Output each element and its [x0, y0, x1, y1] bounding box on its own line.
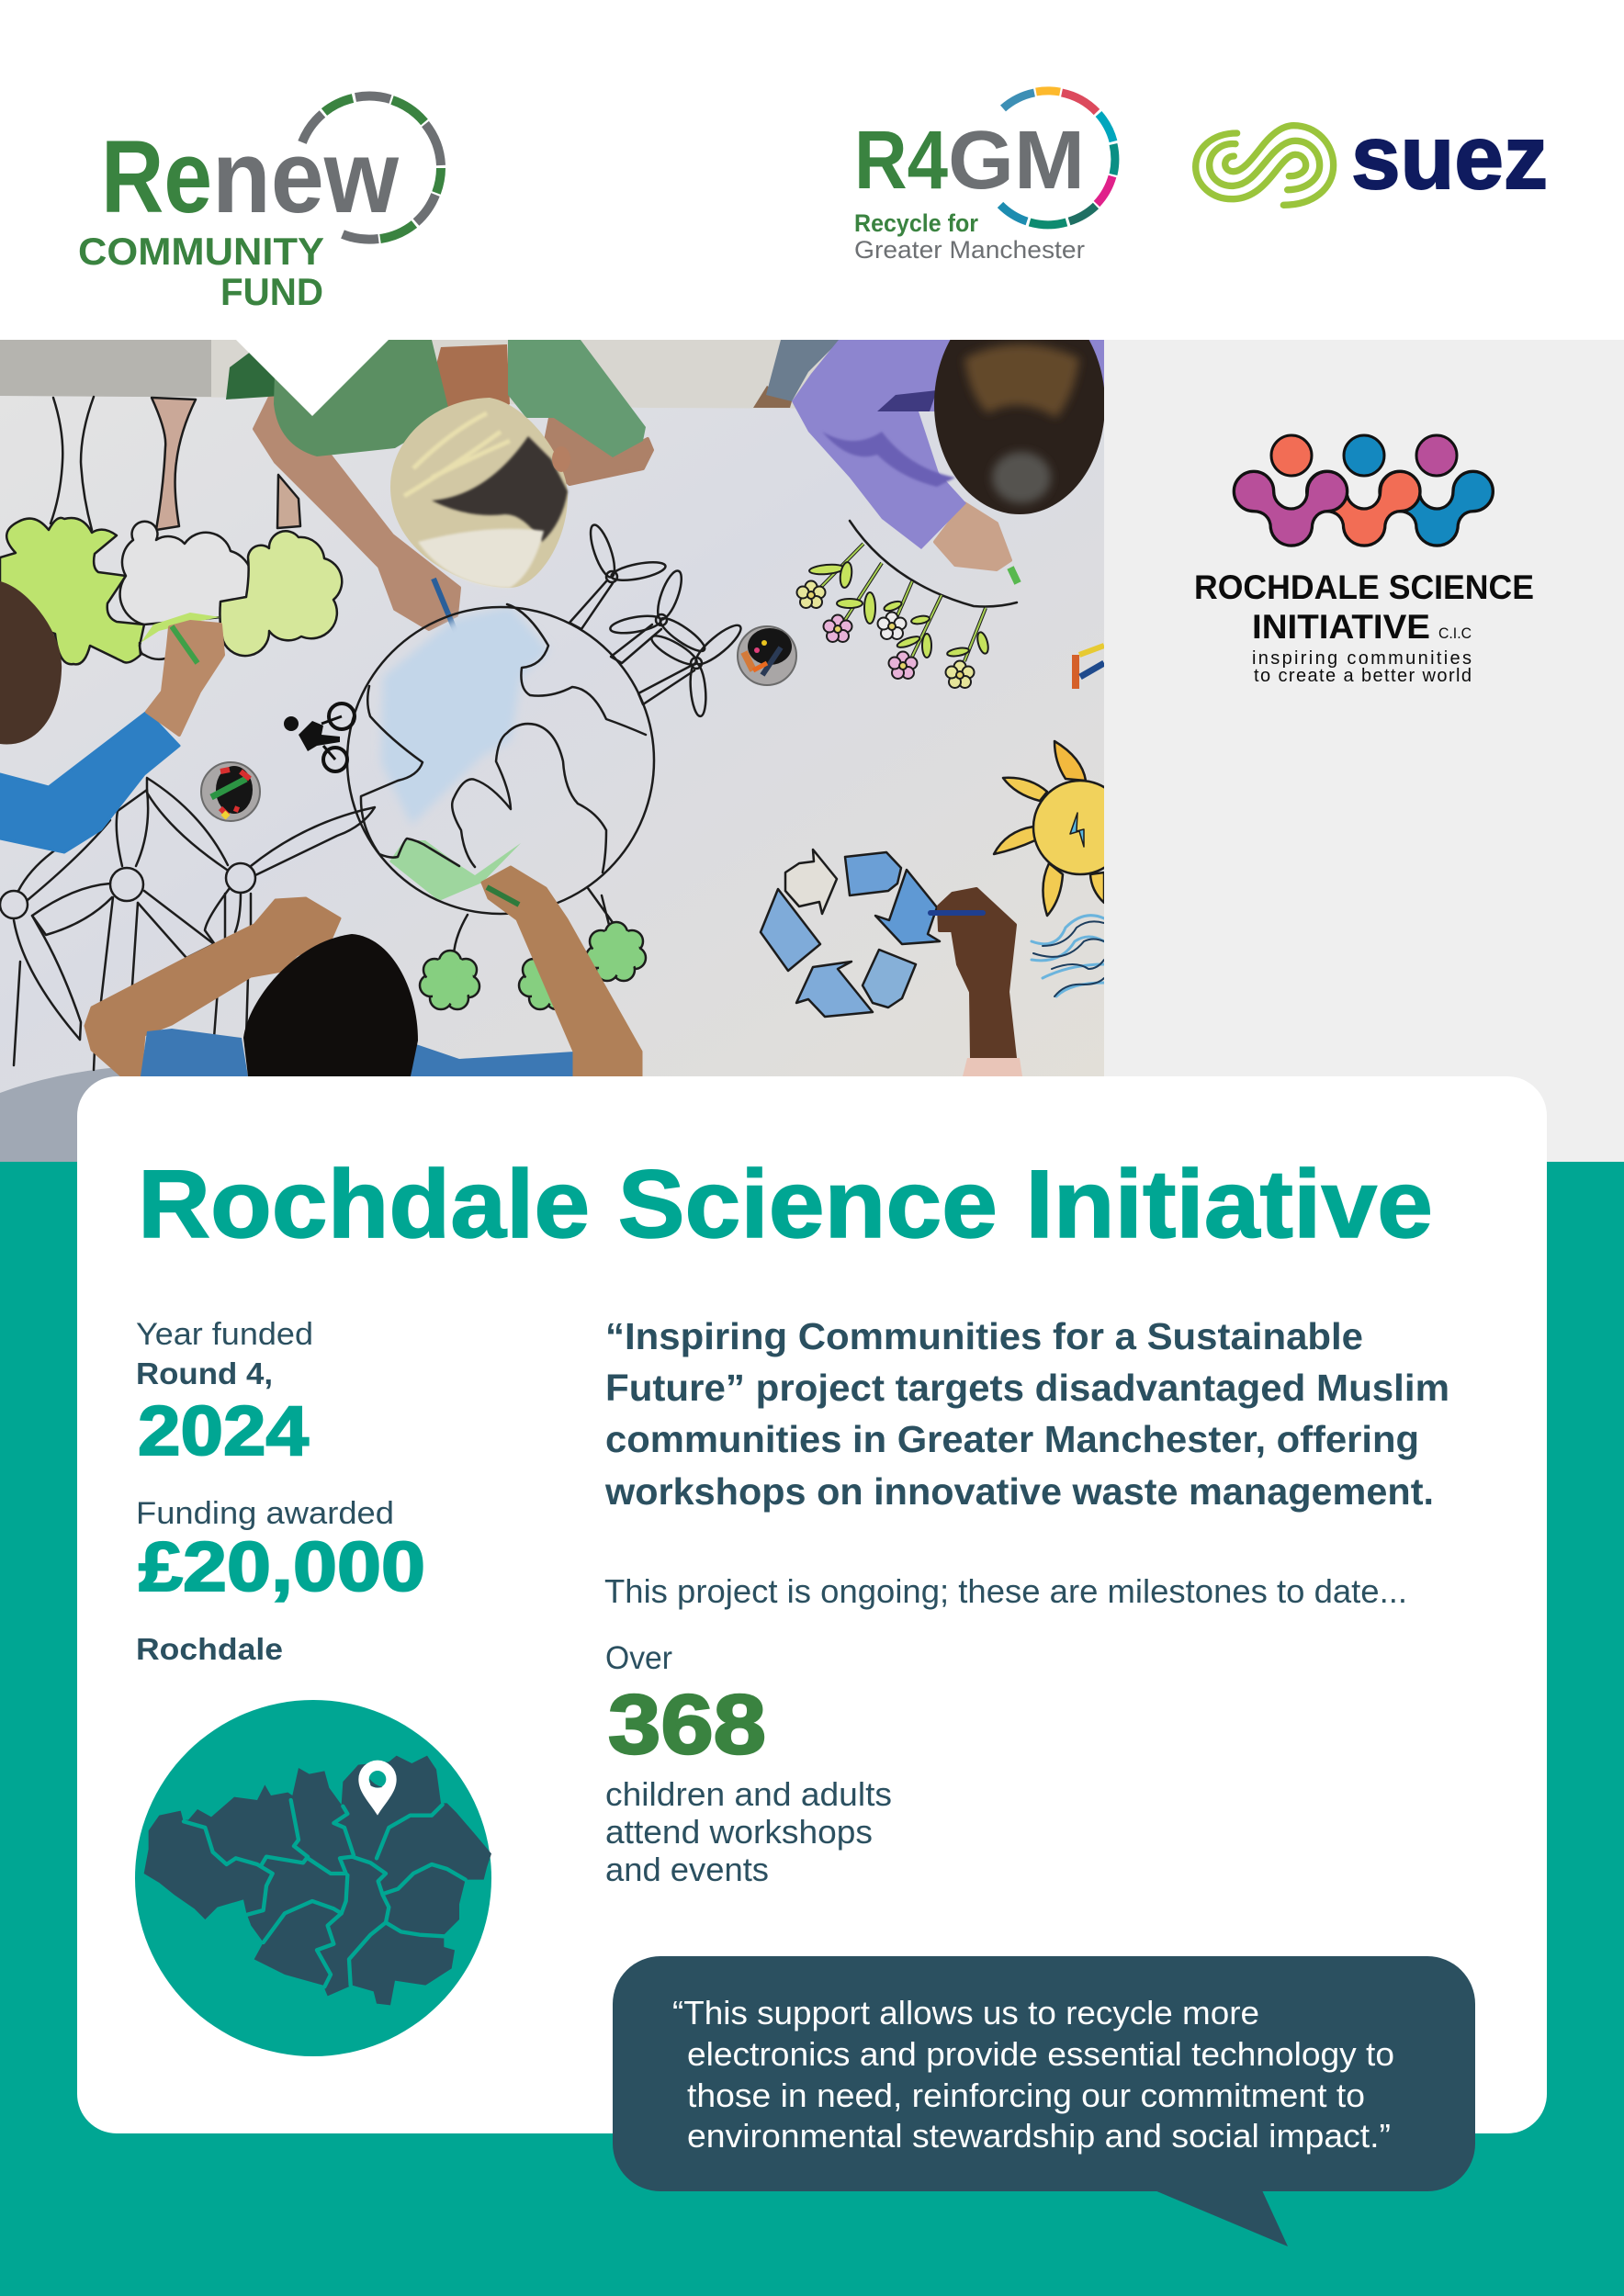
head: blonde hair — [390, 398, 568, 588]
tree 3: pale lime — [220, 531, 342, 656]
blue sleeve — [0, 712, 179, 852]
globe outline — [347, 607, 654, 914]
wordmark: Renew: Re — [101, 119, 212, 234]
head: curly hair — [0, 581, 62, 744]
purple sleeve arm: hand — [935, 503, 1010, 569]
photo paper sheet — [0, 396, 1104, 1093]
logo text: CIC: C.I.C — [1438, 625, 1472, 642]
loose crayons — [1072, 646, 1104, 689]
tree 2 crayon swoosh — [141, 613, 220, 643]
icon: SUEZ swirl — [1196, 126, 1334, 205]
crayon: green bottom — [487, 887, 519, 905]
logo: Renew Community Fund — [78, 96, 441, 313]
bubble body — [613, 1956, 1475, 2191]
number: funding: £20,000 — [139, 1528, 425, 1606]
head: brown hair — [934, 294, 1105, 514]
shirt: boy blue — [141, 1029, 574, 1076]
stat number: 368 — [608, 1678, 766, 1772]
quote line 3: those in need, reinforcing our commitment to — [687, 2077, 1365, 2114]
denim shorts and leg — [753, 386, 792, 408]
tree 1: lime — [0, 518, 144, 664]
summary line 4: workshops on innovative waste management. — [604, 1470, 1434, 1513]
summary line 3: communities in Greater Manchester, offering — [605, 1418, 1419, 1460]
cuff: pink — [963, 1058, 1022, 1076]
hair dark streak — [432, 436, 568, 542]
crayon: navy — [930, 910, 983, 916]
wordmark: Recycle for: Recycle for — [854, 209, 978, 237]
icon: pin hole mark — [369, 1779, 383, 1787]
hair ear — [552, 446, 570, 472]
photo grey floor strip — [0, 340, 211, 397]
hair grey crown — [992, 452, 1051, 503]
small windmills on globe — [570, 523, 746, 717]
logo ring: Renew — [302, 96, 441, 240]
garland curve with flowers — [797, 521, 1017, 688]
logo text: tagline 2: to create a better world — [1254, 666, 1472, 686]
logo: Renew Community Fund: new — [212, 119, 400, 234]
head: boy dark hair — [243, 934, 418, 1076]
map borough borders — [184, 1800, 466, 1986]
recycling symbol — [761, 850, 940, 1017]
quote line 4: environmental stewardship and social impact.” — [687, 2117, 1391, 2155]
photo table corner — [0, 1068, 119, 1162]
icon: map pin — [358, 1761, 397, 1816]
crayon cup right — [738, 626, 796, 685]
hand: dark skin — [939, 889, 1015, 1058]
arm: right of girl — [542, 413, 652, 484]
stat line 3: and events — [605, 1851, 769, 1888]
logo ring: R4GM — [1000, 91, 1115, 225]
wordmark: GM: GM — [948, 115, 1085, 207]
photo: children drawing on paper — [0, 294, 1127, 1162]
bush: left — [420, 951, 479, 1009]
number: year: 2024 — [138, 1392, 309, 1470]
stat line 2: attend workshops — [605, 1813, 873, 1851]
label: funding awarded: Funding awarded — [136, 1496, 394, 1531]
logo: R4GM — [854, 91, 1115, 264]
map: Greater Manchester with pin — [135, 1700, 491, 2056]
logo: SUEZ — [1196, 107, 1548, 208]
text: milestones intro: This project is ongoing; these are milestones to date... — [604, 1572, 1407, 1610]
fact column — [136, 1317, 425, 1666]
globe green land — [389, 840, 521, 901]
icon: cyclist — [284, 703, 355, 771]
shirt: dark green sleeve — [226, 340, 303, 400]
logo text: Initiative: INITIATIVE — [1252, 608, 1430, 646]
logo: Rochdale Science Initiative — [1194, 435, 1534, 686]
photo floor — [145, 340, 830, 409]
wordmark: Fund: FUND — [220, 270, 323, 313]
project summary — [604, 1315, 1449, 1513]
quote line 1: “This support allows us to recycle more — [672, 1994, 1259, 2032]
title: Rochdale Science Initiative — [138, 1151, 1433, 1258]
sun — [994, 741, 1127, 916]
globe stems — [454, 888, 616, 955]
tree trunks — [51, 397, 300, 530]
crayon: green right — [1010, 568, 1018, 583]
map boroughs — [144, 1756, 491, 2005]
summary line 1: “Inspiring Communities for a Sustainable — [605, 1315, 1363, 1357]
hair highlight — [964, 344, 1079, 418]
stat line 1: children and adults — [605, 1775, 892, 1813]
tree 2 lower lobe — [140, 643, 165, 659]
arm: boy right — [482, 867, 641, 1076]
wordmark: Greater Manchester: Greater Manchester — [854, 236, 1085, 264]
water waves — [1032, 916, 1104, 996]
quote line 2: electronics and provide essential technology to — [687, 2035, 1394, 2073]
tree 2: uncoloured — [120, 522, 252, 625]
shirt: green left — [274, 340, 450, 456]
shirt shade — [877, 390, 937, 411]
logo text: tagline 1: inspiring communities — [1252, 648, 1472, 669]
text: location: Rochdale — [136, 1632, 283, 1666]
icon: pin hole — [369, 1771, 386, 1788]
wordmark: Community: COMMUNITY — [78, 230, 324, 273]
hand: left child — [147, 622, 223, 735]
logo icon: people — [1234, 435, 1493, 546]
stat: attendees — [605, 1640, 892, 1888]
bush: middle — [519, 951, 579, 1009]
stat label: Over — [605, 1640, 672, 1676]
neck skin — [427, 344, 510, 432]
logo text: Rochdale Science: ROCHDALE SCIENCE — [1194, 568, 1534, 606]
hair blond streaks — [404, 413, 510, 496]
shirt: green right — [508, 340, 646, 457]
wordmark: suez: suez — [1351, 107, 1548, 208]
hair white tips — [418, 529, 544, 588]
label: year funded: Year funded — [136, 1317, 313, 1352]
white pointer notch — [236, 340, 389, 416]
text: round: Round 4, — [136, 1356, 273, 1390]
bush: right — [586, 922, 646, 981]
crayon cup left — [201, 762, 260, 821]
map disc — [135, 1700, 491, 2056]
shirt: purple — [792, 340, 1104, 549]
crayon: blue — [434, 579, 456, 632]
arm: girl with green shirt — [254, 386, 459, 629]
teal background band — [0, 1162, 1624, 2296]
bubble tail — [1155, 2190, 1288, 2246]
globe continents — [361, 604, 646, 872]
panel: grey logo background — [1104, 340, 1624, 1162]
wordmark: R4: R4 — [854, 115, 948, 207]
summary line 2: Future” project targets disadvantaged Muslim — [605, 1367, 1449, 1409]
crayon: green left — [172, 626, 197, 663]
callout: quote bubble — [613, 1956, 1475, 2246]
panel: white card — [77, 1076, 1547, 2133]
arm: boy left — [85, 898, 340, 1076]
big windmills — [0, 778, 375, 1070]
globe blue wash — [381, 606, 549, 825]
